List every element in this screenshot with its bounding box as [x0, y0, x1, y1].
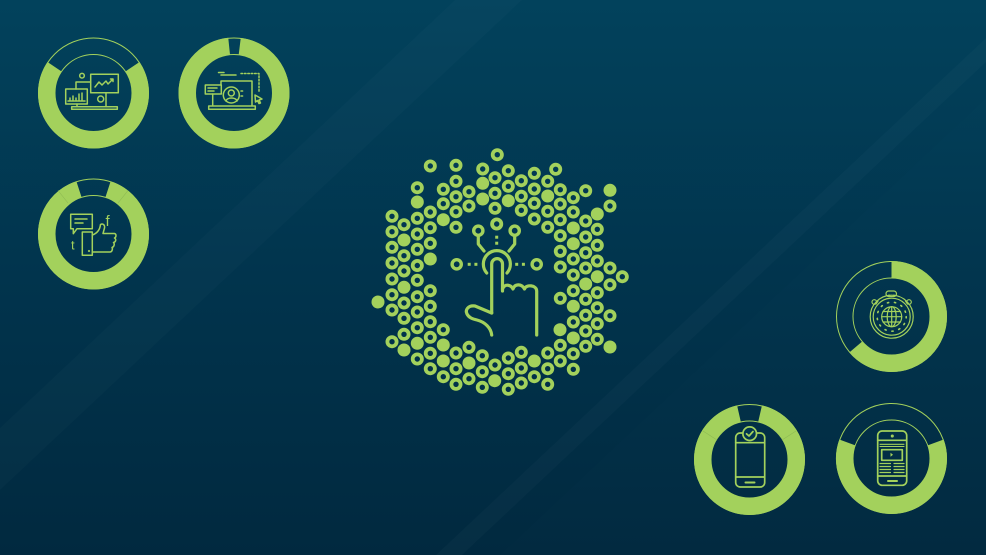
ring dots	[372, 150, 627, 394]
icon: pointing hand with touch nodes	[452, 226, 541, 335]
icon: phone with check badge	[736, 427, 765, 487]
icon: like, comment and social letters: f	[106, 213, 110, 230]
panel: central dot ring with touch icon	[372, 150, 627, 394]
panel: stopwatch donut	[836, 262, 946, 372]
icon: like, comment and social letters: t	[71, 238, 75, 252]
icon: like, comment and social letters	[71, 213, 116, 255]
panel: mobile video donut	[831, 398, 952, 519]
panel: analytics donut	[28, 28, 159, 158]
icon: stopwatch with globe	[870, 291, 913, 338]
panel: profile donut	[179, 38, 289, 148]
panel: mobile check donut	[693, 403, 806, 516]
icon: laptop with profile	[205, 72, 262, 109]
panel: social donut	[34, 175, 153, 293]
icon: phone with video page	[878, 431, 907, 485]
icon: analytics screens	[66, 73, 118, 109]
